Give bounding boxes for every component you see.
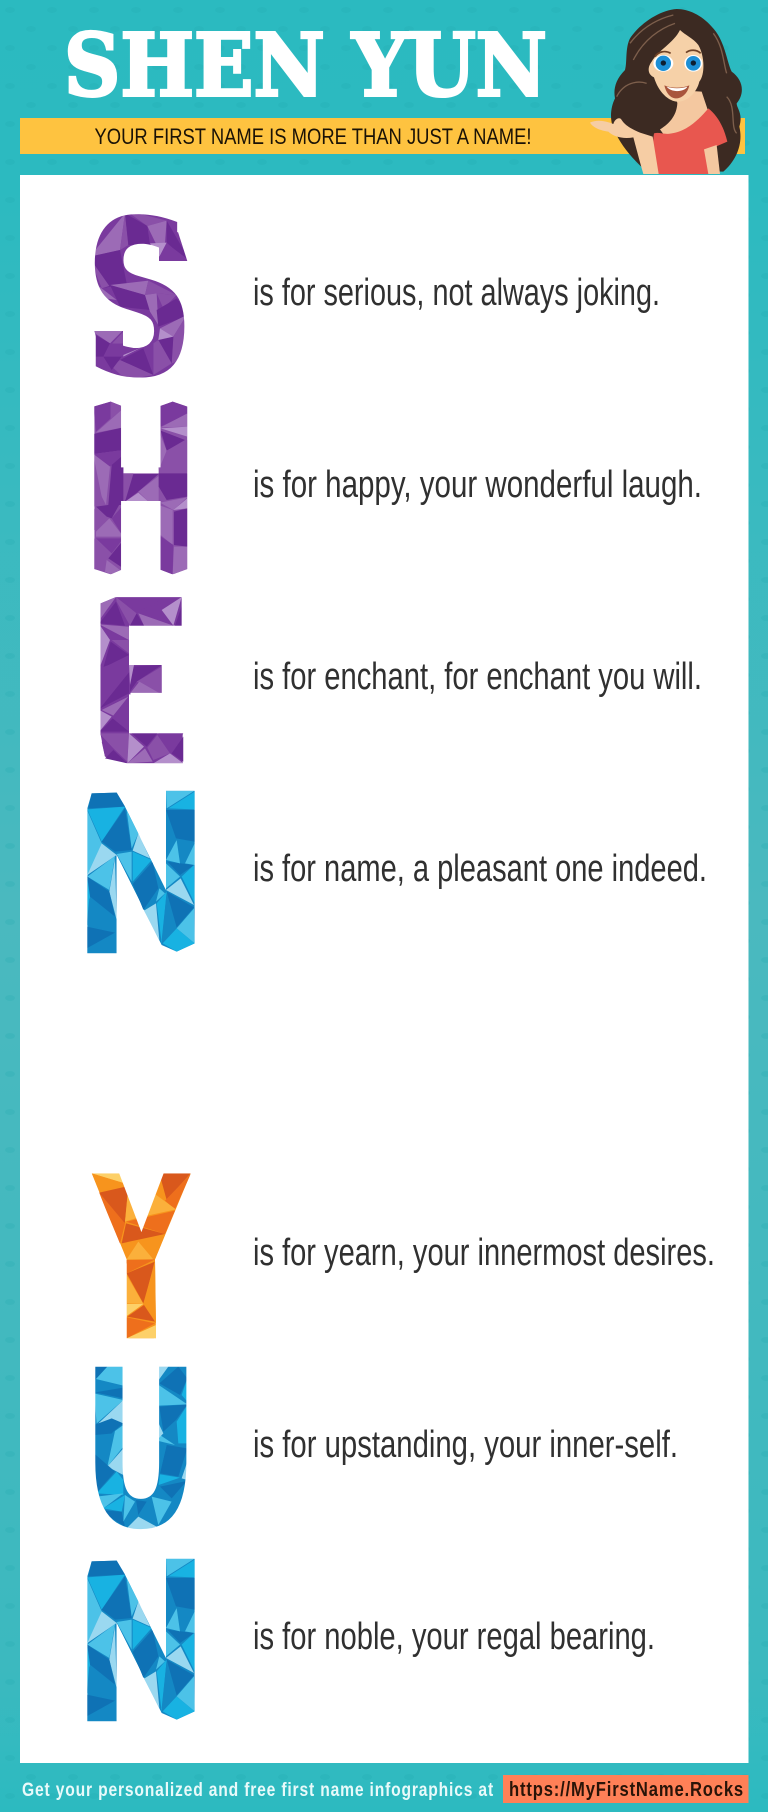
left arm and hand [590,118,659,174]
footer [22,1775,748,1803]
letter S [94,214,188,378]
right arm [704,145,720,174]
shirt [653,108,727,174]
subtitle text: YOUR FIRST NAME IS MORE THAN JUST A NAME! [94,124,532,149]
face [649,30,703,102]
row: S [87,210,660,383]
letter N second [87,1559,195,1721]
neck and chest [660,90,708,134]
row: E [99,597,702,763]
letter Y [92,1173,191,1338]
row: N (second) [87,1559,655,1721]
letter U [95,1366,186,1530]
mouth [664,85,689,98]
letter N [87,791,195,953]
row: Y [92,1173,715,1338]
subtitle banner [20,118,745,154]
row: H [93,402,702,574]
hair [611,9,742,172]
acrostic rows [87,210,715,1721]
text: noble: is for noble, your regal bearing. [253,1616,655,1658]
row: N [87,791,707,953]
letter H [93,402,187,574]
title: SHEN YUN [64,16,547,116]
illustration: woman presenting [590,9,742,174]
row: U [90,1365,678,1532]
letter E [99,597,183,763]
footer call to action: Get your personalized and free first name infographics at [22,1780,494,1801]
eyes [653,55,702,72]
